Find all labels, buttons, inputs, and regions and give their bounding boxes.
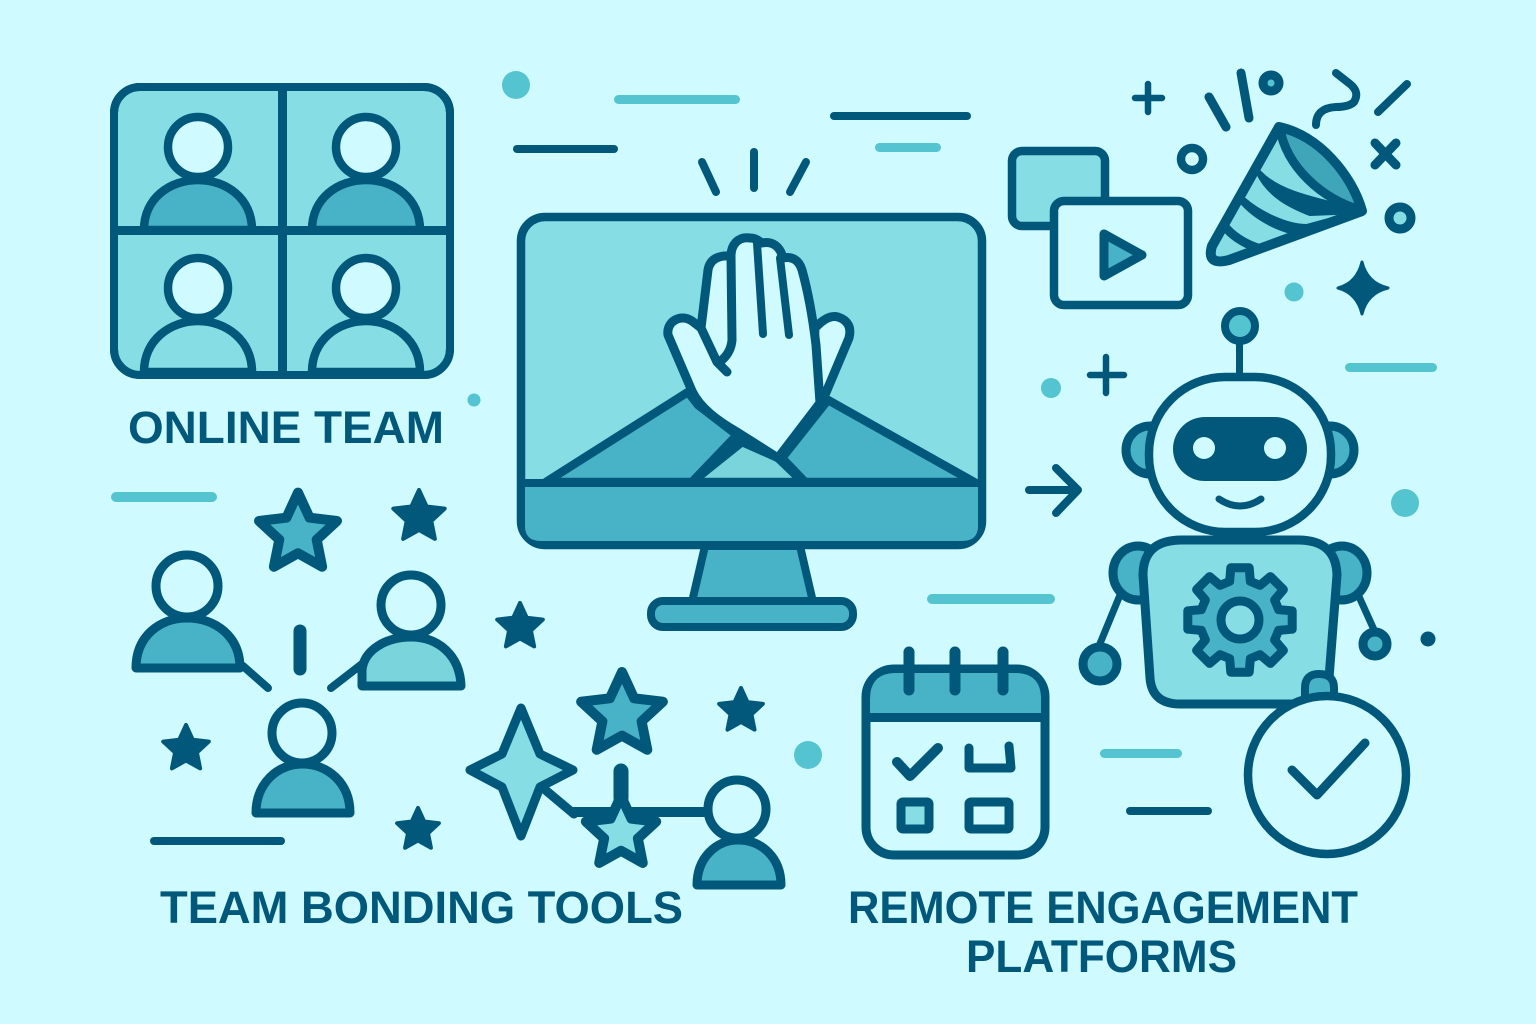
icon: robot [1083, 311, 1387, 704]
shoulders and arms [1083, 546, 1387, 681]
panel: central monitor with high five [521, 217, 982, 545]
icon: check badge [1248, 674, 1406, 854]
right sleeve [782, 400, 974, 482]
heading: remote engagement platforms: PLATFORMS [966, 931, 1237, 982]
person: left [136, 555, 268, 688]
icon: monitor stand [651, 546, 853, 627]
person: bottom [256, 703, 350, 813]
heading: remote engagement platforms [848, 882, 1358, 982]
antenna [1225, 311, 1255, 378]
person: bottom right [312, 258, 420, 372]
heading: remote engagement platforms: REMOTE ENGAGEMENT [848, 882, 1358, 933]
visor [1173, 417, 1307, 481]
person: right [331, 575, 461, 688]
icon: calendar [866, 652, 1045, 855]
person: bottom left [144, 258, 252, 372]
connected sparkle network [470, 708, 781, 885]
ears [1126, 426, 1354, 474]
stars [163, 490, 763, 848]
connector tick [294, 631, 306, 669]
hand [668, 238, 820, 458]
icon: party popper [1211, 127, 1362, 261]
icon: high five ticks [702, 152, 806, 192]
decorative accents [111, 71, 1437, 845]
person: top right [312, 117, 420, 230]
team bonding people [136, 555, 461, 813]
left sleeve [546, 392, 737, 482]
heading: team bonding tools: TEAM BONDING TOOLS [160, 882, 683, 933]
center cuff [692, 442, 803, 482]
person: top left [144, 117, 252, 230]
arrow to robot [1029, 468, 1078, 513]
heading: online team: ONLINE TEAM [128, 402, 444, 453]
smile [1219, 499, 1261, 506]
confetti [1090, 73, 1411, 393]
head [1149, 377, 1331, 532]
gear [1188, 568, 1292, 672]
body [1143, 540, 1337, 704]
icon: video windows [1012, 151, 1188, 305]
rear thumb [812, 316, 850, 402]
panel: online team video grid [114, 87, 450, 375]
